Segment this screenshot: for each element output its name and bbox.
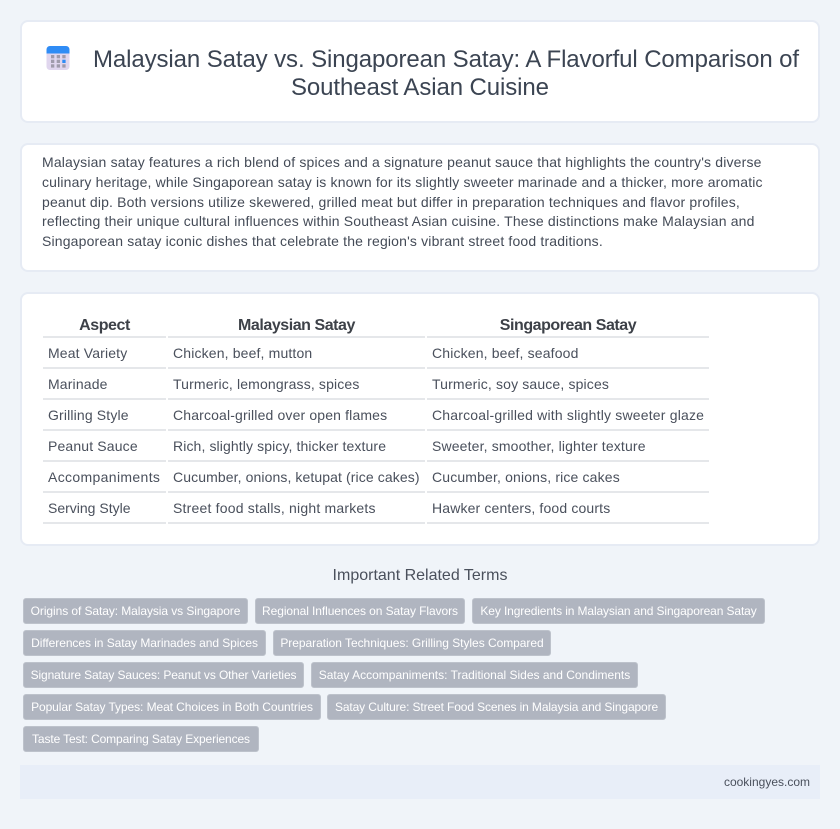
- intro text: [42, 154, 763, 249]
- footer: [20, 765, 820, 799]
- comparison table: Hawker centers, food courts: [432, 500, 610, 516]
- related terms chips: Differences in Satay Marinades and Spices: [31, 636, 258, 650]
- intro text: peanut dip. Both versions utilize skewered, grilled meat but differ in preparation techniques and flavor profiles,: [42, 194, 740, 210]
- title: [93, 46, 800, 101]
- title: Malaysian Satay vs. Singaporean Satay: A Flavorful Comparison of: [93, 46, 799, 73]
- comparison table: Charcoal-grilled over open flames: [173, 407, 387, 423]
- comparison table: [43, 317, 709, 524]
- related terms chips: Origins of Satay: Malaysia vs Singapore: [31, 604, 240, 618]
- footer credit: cookingyes.com: [724, 775, 810, 789]
- comparison table: Malaysian Satay: [238, 317, 355, 334]
- comparison table: Rich, slightly spicy, thicker texture: [173, 438, 386, 454]
- comparison table: Turmeric, lemongrass, spices: [173, 376, 360, 392]
- comparison table: Singaporean Satay: [500, 317, 636, 334]
- related terms chips: Satay Culture: Street Food Scenes in Malaysia and Singapore: [335, 700, 658, 714]
- comparison table: Marinade: [48, 376, 108, 392]
- comparison table: Sweeter, smoother, lighter texture: [432, 438, 646, 454]
- panel: title card: [20, 20, 820, 123]
- comparison table: Turmeric, soy sauce, spices: [432, 376, 609, 392]
- related terms chips: Taste Test: Comparing Satay Experiences: [32, 732, 250, 746]
- related terms chips: Preparation Techniques: Grilling Styles Compared: [280, 636, 544, 650]
- heading: related terms: Important Related Terms: [333, 567, 507, 584]
- related terms chips: Regional Influences on Satay Flavors: [262, 604, 458, 618]
- comparison table: Serving Style: [48, 500, 130, 516]
- related terms chips: Signature Satay Sauces: Peanut vs Other Varieties: [31, 668, 296, 682]
- comparison table: Chicken, beef, seafood: [432, 345, 579, 361]
- comparison table: Meat Variety: [48, 345, 127, 361]
- intro text: Singaporean satay iconic dishes that celebrate the region's vibrant street food traditions.: [42, 233, 603, 249]
- comparison table: Cucumber, onions, rice cakes: [432, 469, 620, 485]
- icon: calendar: [46, 46, 70, 70]
- intro text: reflecting their unique cultural influences within Southeast Asian cuisine. These distinctions make Malaysian and: [42, 213, 755, 229]
- comparison table: Accompaniments: [48, 469, 160, 485]
- comparison table: Cucumber, onions, ketupat (rice cakes): [173, 469, 420, 485]
- related terms chips: Satay Accompaniments: Traditional Sides and Condiments: [319, 668, 630, 682]
- comparison table: Chicken, beef, mutton: [173, 345, 312, 361]
- intro text: Malaysian satay features a rich blend of spices and a signature peanut sauce that highlights the country's diverse: [42, 154, 762, 170]
- panel: intro paragraph: [20, 143, 820, 272]
- related terms chips: [23, 598, 765, 752]
- intro text: culinary heritage, while Singaporean satay is known for its slightly sweeter marinade and a thicker, more aromatic: [42, 174, 763, 190]
- comparison table: Aspect: [79, 317, 130, 334]
- comparison table: Street food stalls, night markets: [173, 500, 376, 516]
- title: Southeast Asian Cuisine: [291, 74, 549, 101]
- panel: comparison table card: [20, 292, 820, 546]
- comparison table: Grilling Style: [48, 407, 129, 423]
- comparison table: Charcoal-grilled with slightly sweeter glaze: [432, 407, 704, 423]
- related terms chips: Popular Satay Types: Meat Choices in Both Countries: [31, 700, 313, 714]
- comparison table: Peanut Sauce: [48, 438, 138, 454]
- related terms chips: Key Ingredients in Malaysian and Singaporean Satay: [480, 604, 757, 618]
